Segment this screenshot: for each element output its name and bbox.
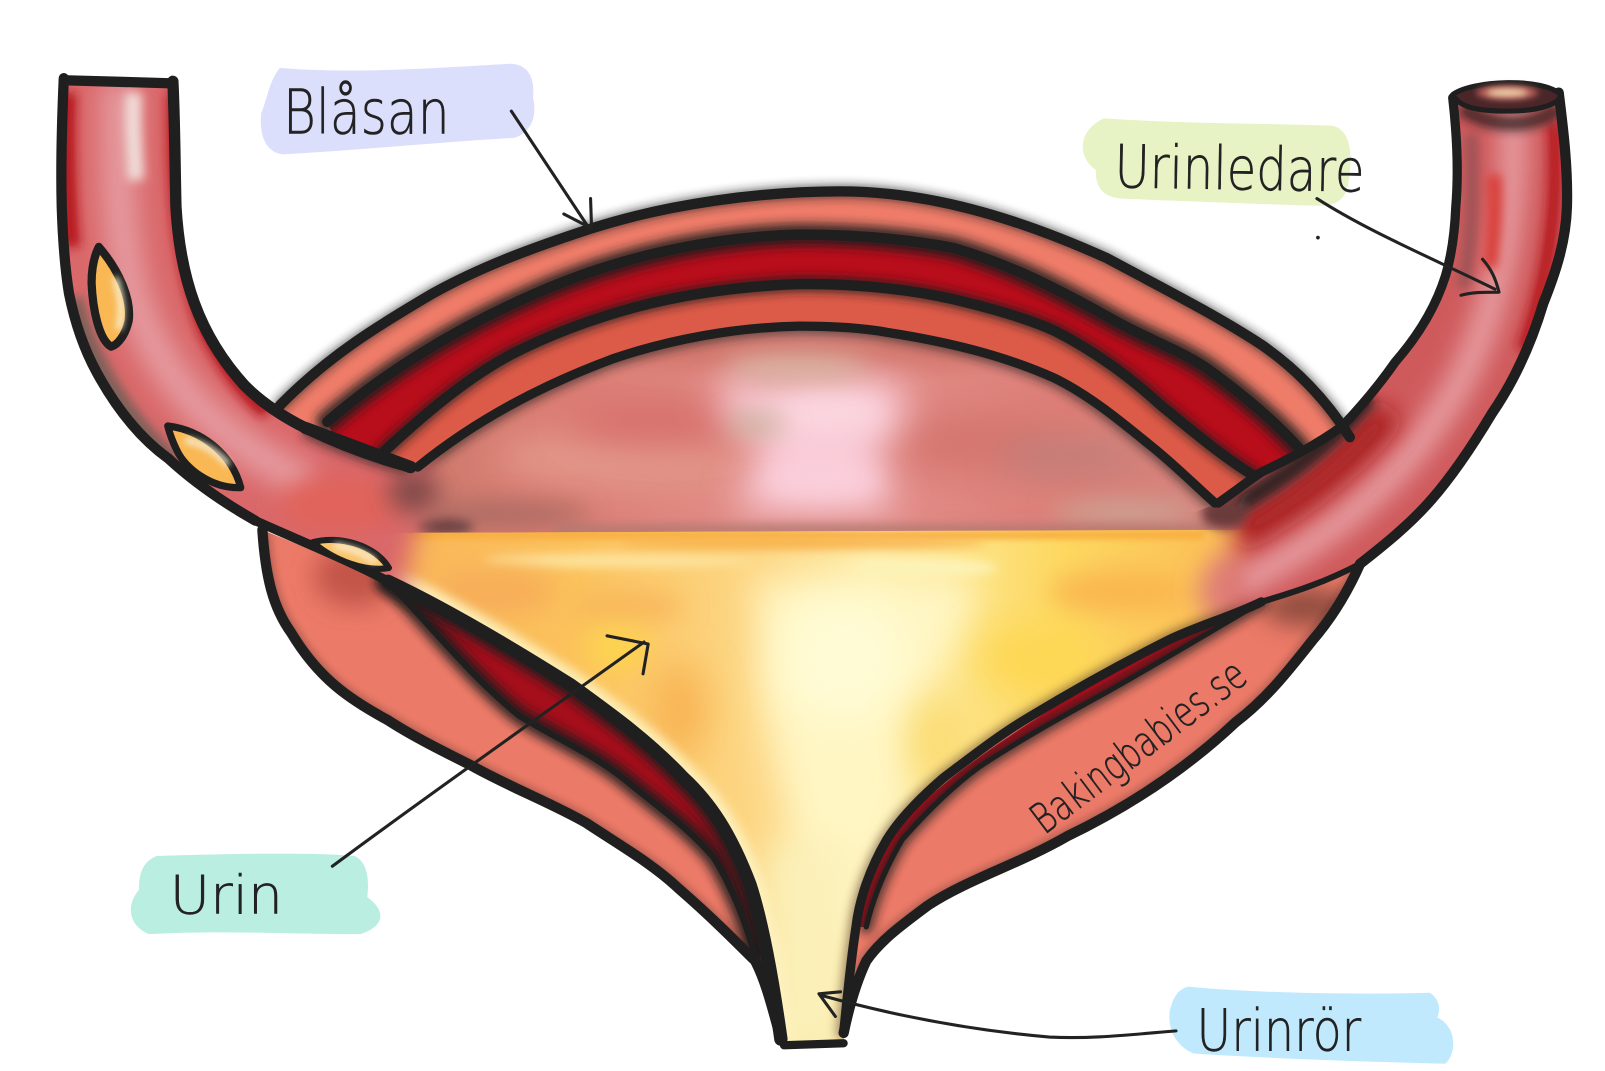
label text: Urin	[170, 864, 283, 927]
urine droplet 3	[313, 540, 389, 569]
label background	[1169, 987, 1453, 1064]
arrow: Urinledare	[1317, 199, 1499, 295]
bladder lumen	[397, 330, 1249, 533]
label background	[1083, 118, 1351, 206]
arrow: Urin	[332, 636, 648, 866]
label: Urinrör	[1169, 987, 1453, 1064]
label background	[261, 64, 534, 154]
watermark text: Bakingbabies.se	[1021, 649, 1256, 843]
lower left bladder wall	[268, 532, 762, 963]
ink outlines	[255, 191, 1360, 1045]
label: Urin	[131, 854, 380, 934]
arrow: Urinrör	[819, 992, 1176, 1038]
left ureter	[56, 73, 451, 592]
label text: Urinrör	[1197, 997, 1361, 1064]
label background	[131, 854, 380, 934]
lower right bladder wall	[854, 572, 1351, 977]
label: Urinledare	[1083, 118, 1365, 207]
bladder wall dome	[280, 191, 1350, 514]
arrow: Blåsan	[511, 111, 592, 228]
urine droplet 1	[92, 247, 129, 347]
label text: Urinledare	[1114, 133, 1365, 207]
urine droplet 2	[168, 426, 241, 488]
stray dot	[1316, 236, 1320, 240]
urine	[390, 530, 1259, 1041]
right ureter	[1196, 80, 1572, 610]
ureter opening	[1453, 83, 1561, 111]
label: Blåsan	[261, 64, 534, 154]
label text: Blåsan	[283, 77, 450, 149]
